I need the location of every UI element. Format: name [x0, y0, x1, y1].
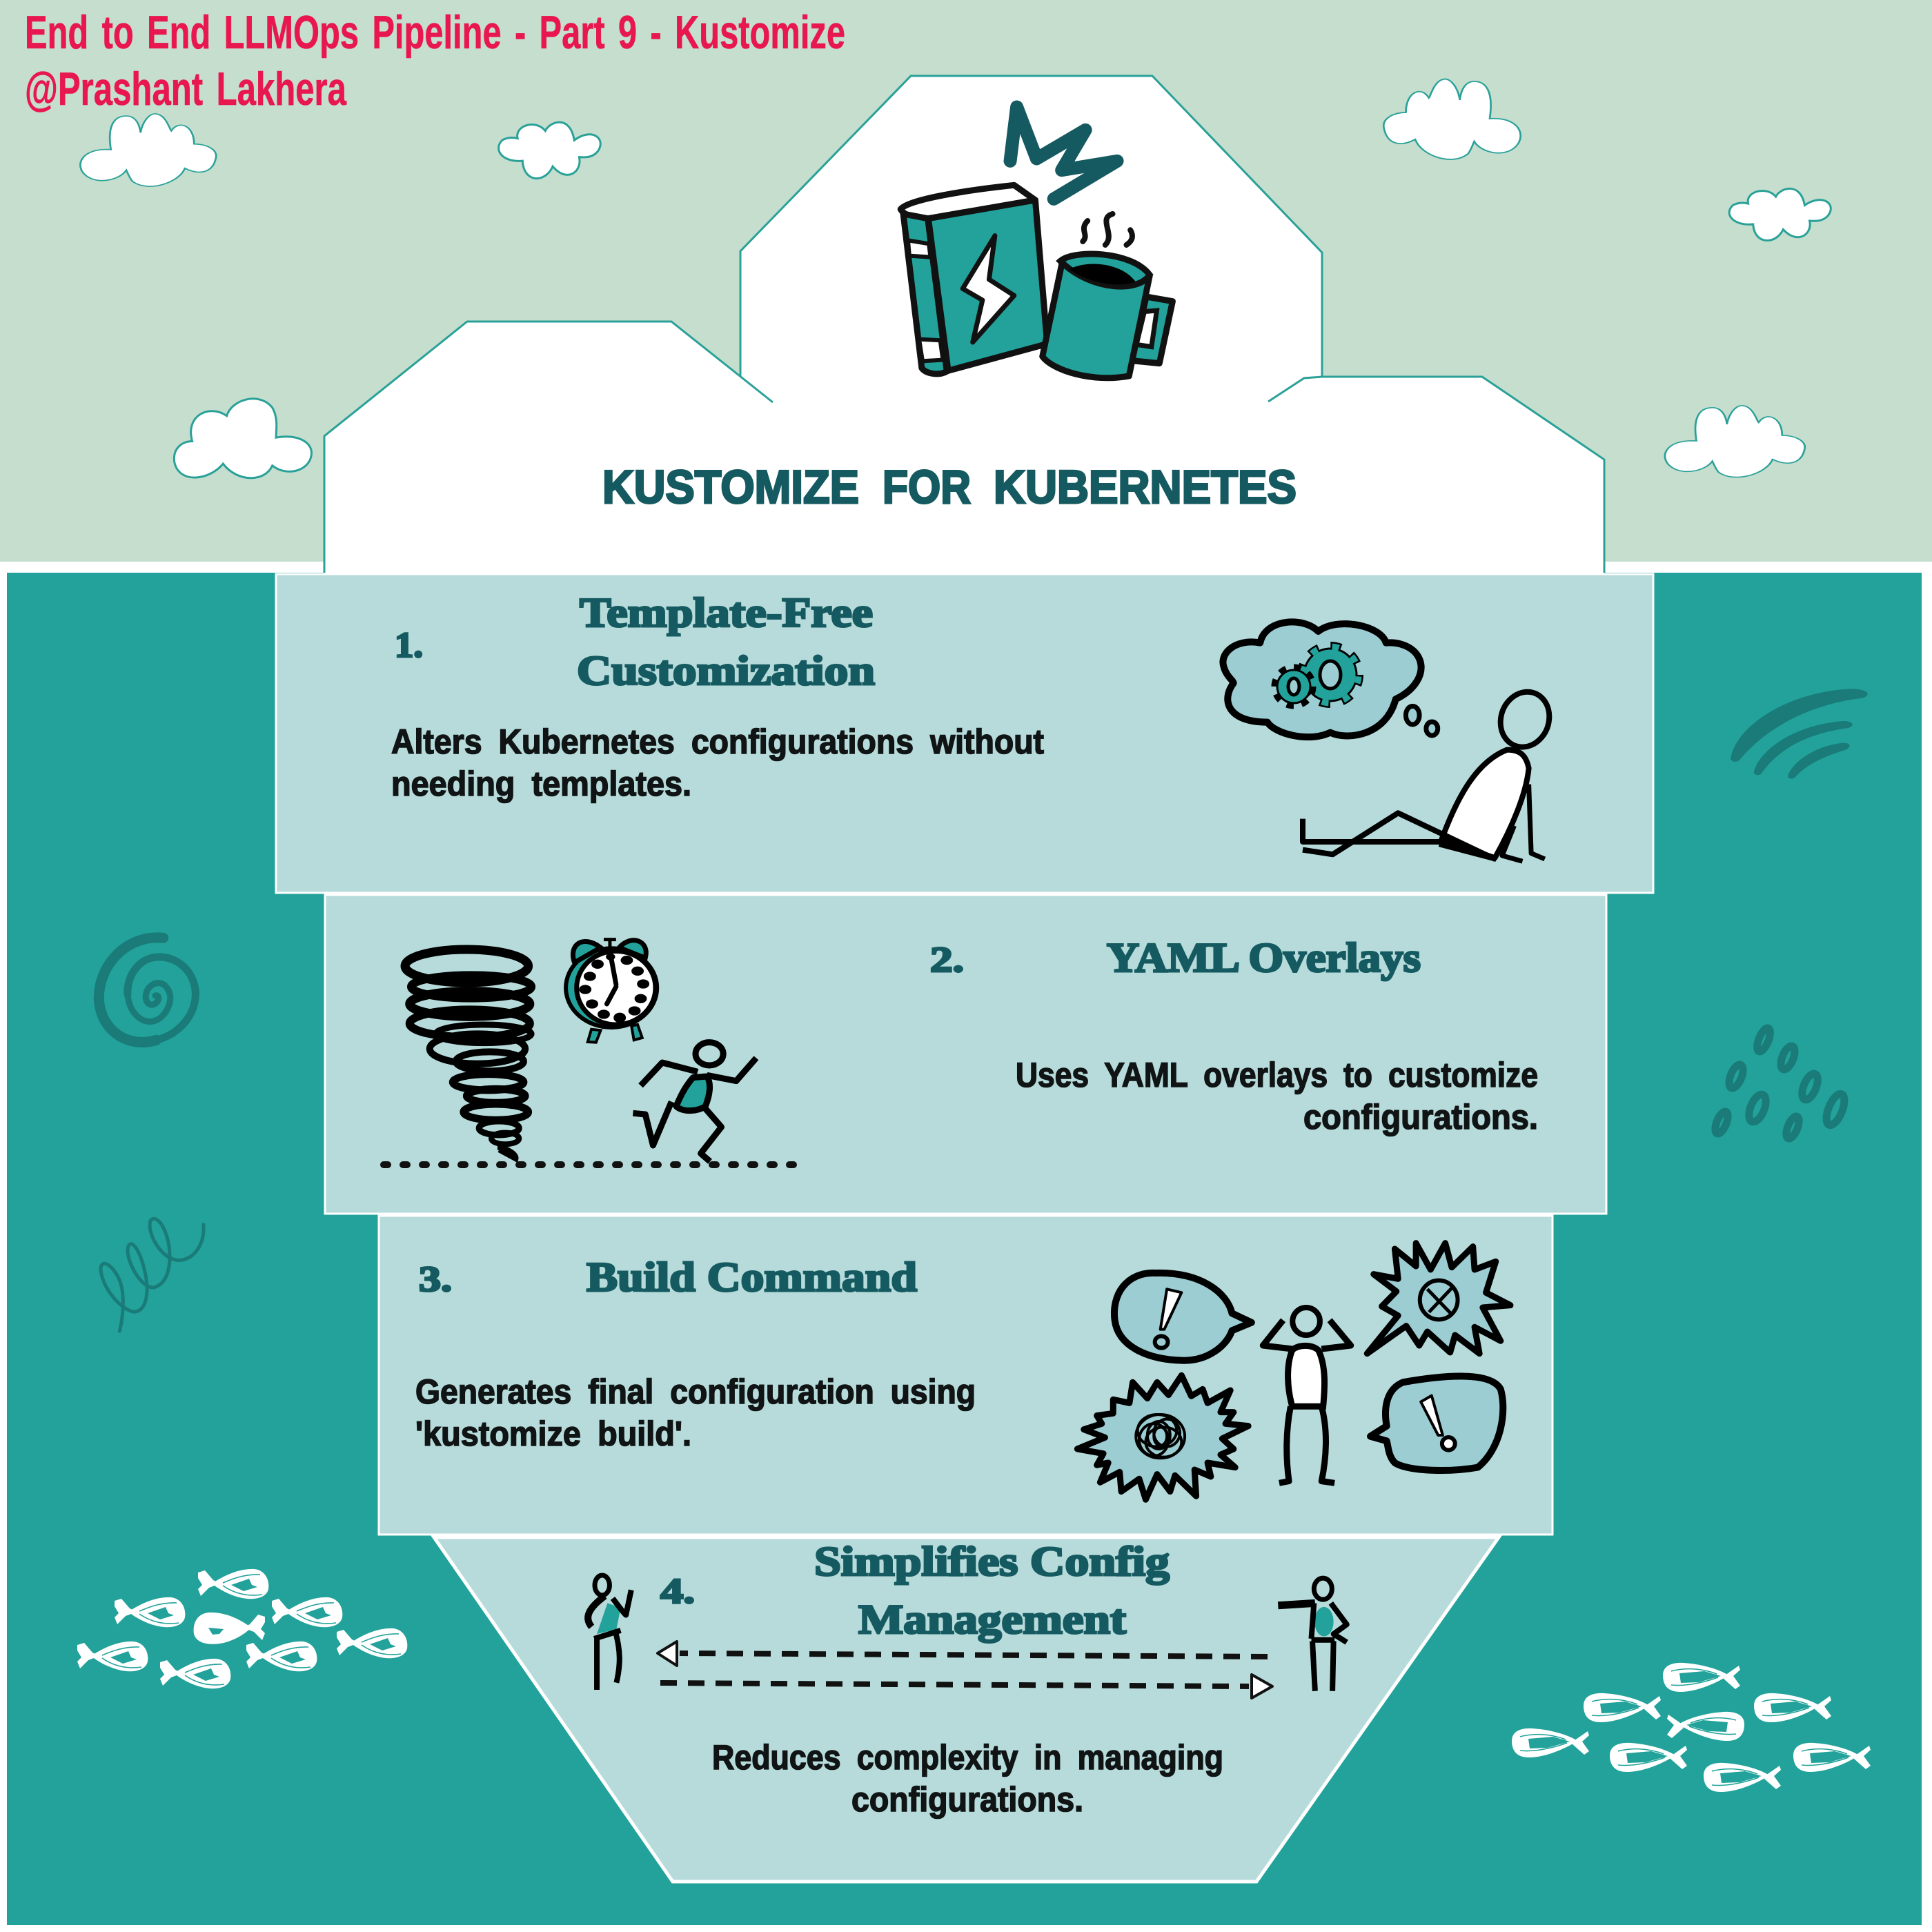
heading: Build Command	[586, 1254, 917, 1300]
decoration: curl	[101, 1219, 204, 1331]
icon: left person	[588, 1575, 631, 1690]
description line 2: configurations.	[851, 1780, 1083, 1819]
icon: right person	[1278, 1578, 1347, 1691]
scribble	[1136, 1414, 1185, 1458]
thought cloud	[1223, 622, 1421, 737]
number 2: 2.	[930, 940, 964, 980]
cloud 4	[1729, 188, 1831, 241]
fish school left	[77, 1569, 407, 1688]
person	[1292, 1308, 1320, 1335]
lightning bolt	[963, 236, 1014, 342]
description line 2: configurations.	[1303, 1098, 1538, 1136]
panel 3 background	[379, 1216, 1552, 1535]
cloud 3	[1383, 79, 1521, 159]
spine band top	[908, 240, 930, 257]
clock feet	[588, 1025, 642, 1043]
ground dotted line	[384, 1161, 793, 1168]
icon: alarm clock	[566, 940, 657, 1043]
clock face	[577, 951, 656, 1025]
legs	[1303, 813, 1497, 859]
panel 2: yaml overlays	[325, 895, 1606, 1214]
mug body	[1043, 264, 1150, 378]
panel 3: build command	[379, 1216, 1552, 1535]
clock back	[566, 948, 657, 1027]
icon: gears	[1275, 647, 1359, 705]
author line: @Prashant Lakhera	[25, 63, 347, 115]
spine band bottom	[919, 339, 943, 361]
large gear	[1302, 647, 1359, 703]
icon: stressed person with speech bubbles	[1077, 1243, 1510, 1499]
peak outlines	[324, 76, 1604, 573]
icon: thinking person	[1223, 622, 1552, 861]
peak fill	[324, 76, 1604, 574]
decoration: dots	[1713, 1027, 1848, 1140]
number 3: 3.	[419, 1260, 452, 1299]
heading: YAML Overlays	[1107, 935, 1421, 980]
heading line 2: Customization	[577, 648, 875, 693]
decoration: waves	[1731, 689, 1868, 778]
book cover	[928, 200, 1047, 371]
clock numerals	[579, 954, 649, 1023]
panel 2 background	[325, 895, 1606, 1214]
description line 1: Generates final configuration using	[415, 1372, 976, 1411]
fish school right	[1512, 1663, 1871, 1792]
head	[1498, 691, 1552, 747]
arrow: right to left	[658, 1642, 1268, 1666]
decoration: spiral	[99, 938, 195, 1042]
speech bubble top left	[1114, 1273, 1252, 1361]
description line 1: Reduces complexity in managing	[712, 1738, 1223, 1777]
icon: book and mug	[900, 107, 1172, 378]
thought bubbles	[1406, 706, 1419, 724]
sky background	[0, 0, 1932, 562]
clock bells	[573, 940, 646, 963]
burst bubble top right	[1367, 1243, 1510, 1354]
arrow: left to right	[660, 1675, 1272, 1698]
clock crown	[604, 940, 616, 949]
torso	[1441, 750, 1529, 858]
small gear	[1275, 668, 1312, 705]
title	[25, 6, 845, 115]
cross in circle	[1420, 1281, 1458, 1319]
burst bubble bottom left	[1077, 1375, 1248, 1499]
number 4: 4.	[660, 1572, 695, 1611]
mug handle hole	[1136, 310, 1156, 347]
word: kustomize: KUSTOMIZE	[602, 461, 859, 513]
heading line 1: Simplifies Config	[814, 1539, 1170, 1584]
clock hands	[607, 954, 616, 1004]
description line 2: 'kustomize build'.	[415, 1414, 691, 1453]
cloud 6	[1665, 406, 1805, 477]
mountain: white peak shape	[324, 76, 1604, 574]
word: for: FOR	[883, 461, 971, 513]
number 1: 1.	[395, 626, 423, 665]
heading line 2: Management	[858, 1597, 1126, 1642]
clouds	[80, 79, 1831, 478]
cloud 1	[80, 114, 216, 186]
steam	[1083, 214, 1132, 245]
book spine	[903, 214, 947, 374]
panel 1: template-free customization	[276, 574, 1653, 893]
panel 1 background	[276, 574, 1653, 893]
description line 1: Alters Kubernetes configurations without	[391, 722, 1044, 761]
icon: tornado	[405, 949, 531, 1159]
word: kubernetes: KUBERNETES	[994, 461, 1297, 513]
panel 4: simplifies config management	[434, 1537, 1499, 1882]
title line 1: End to End LLMOps Pipeline - Part 9 - Kustomize	[25, 6, 845, 59]
cloud 2	[499, 122, 600, 179]
spark squiggle	[1010, 107, 1117, 199]
cloud 5	[174, 399, 311, 478]
exclamation mark	[1421, 1396, 1443, 1435]
arms	[1502, 785, 1545, 861]
heading line 1: Template-Free	[580, 590, 873, 635]
mug handle	[1132, 297, 1172, 364]
sea background	[7, 573, 1922, 1925]
mug rim	[1061, 254, 1150, 286]
description line 1: Uses YAML overlays to customize	[1016, 1056, 1538, 1094]
heading: Kustomize for Kubernetes	[602, 461, 1297, 513]
panel 4 background	[434, 1537, 1499, 1882]
exclamation mark	[1161, 1289, 1181, 1330]
icon: running person	[633, 1043, 756, 1161]
book pages	[900, 185, 1035, 219]
coffee	[1070, 264, 1136, 284]
speech bubble bottom right	[1370, 1377, 1503, 1470]
description line 2: needing templates.	[391, 765, 691, 803]
